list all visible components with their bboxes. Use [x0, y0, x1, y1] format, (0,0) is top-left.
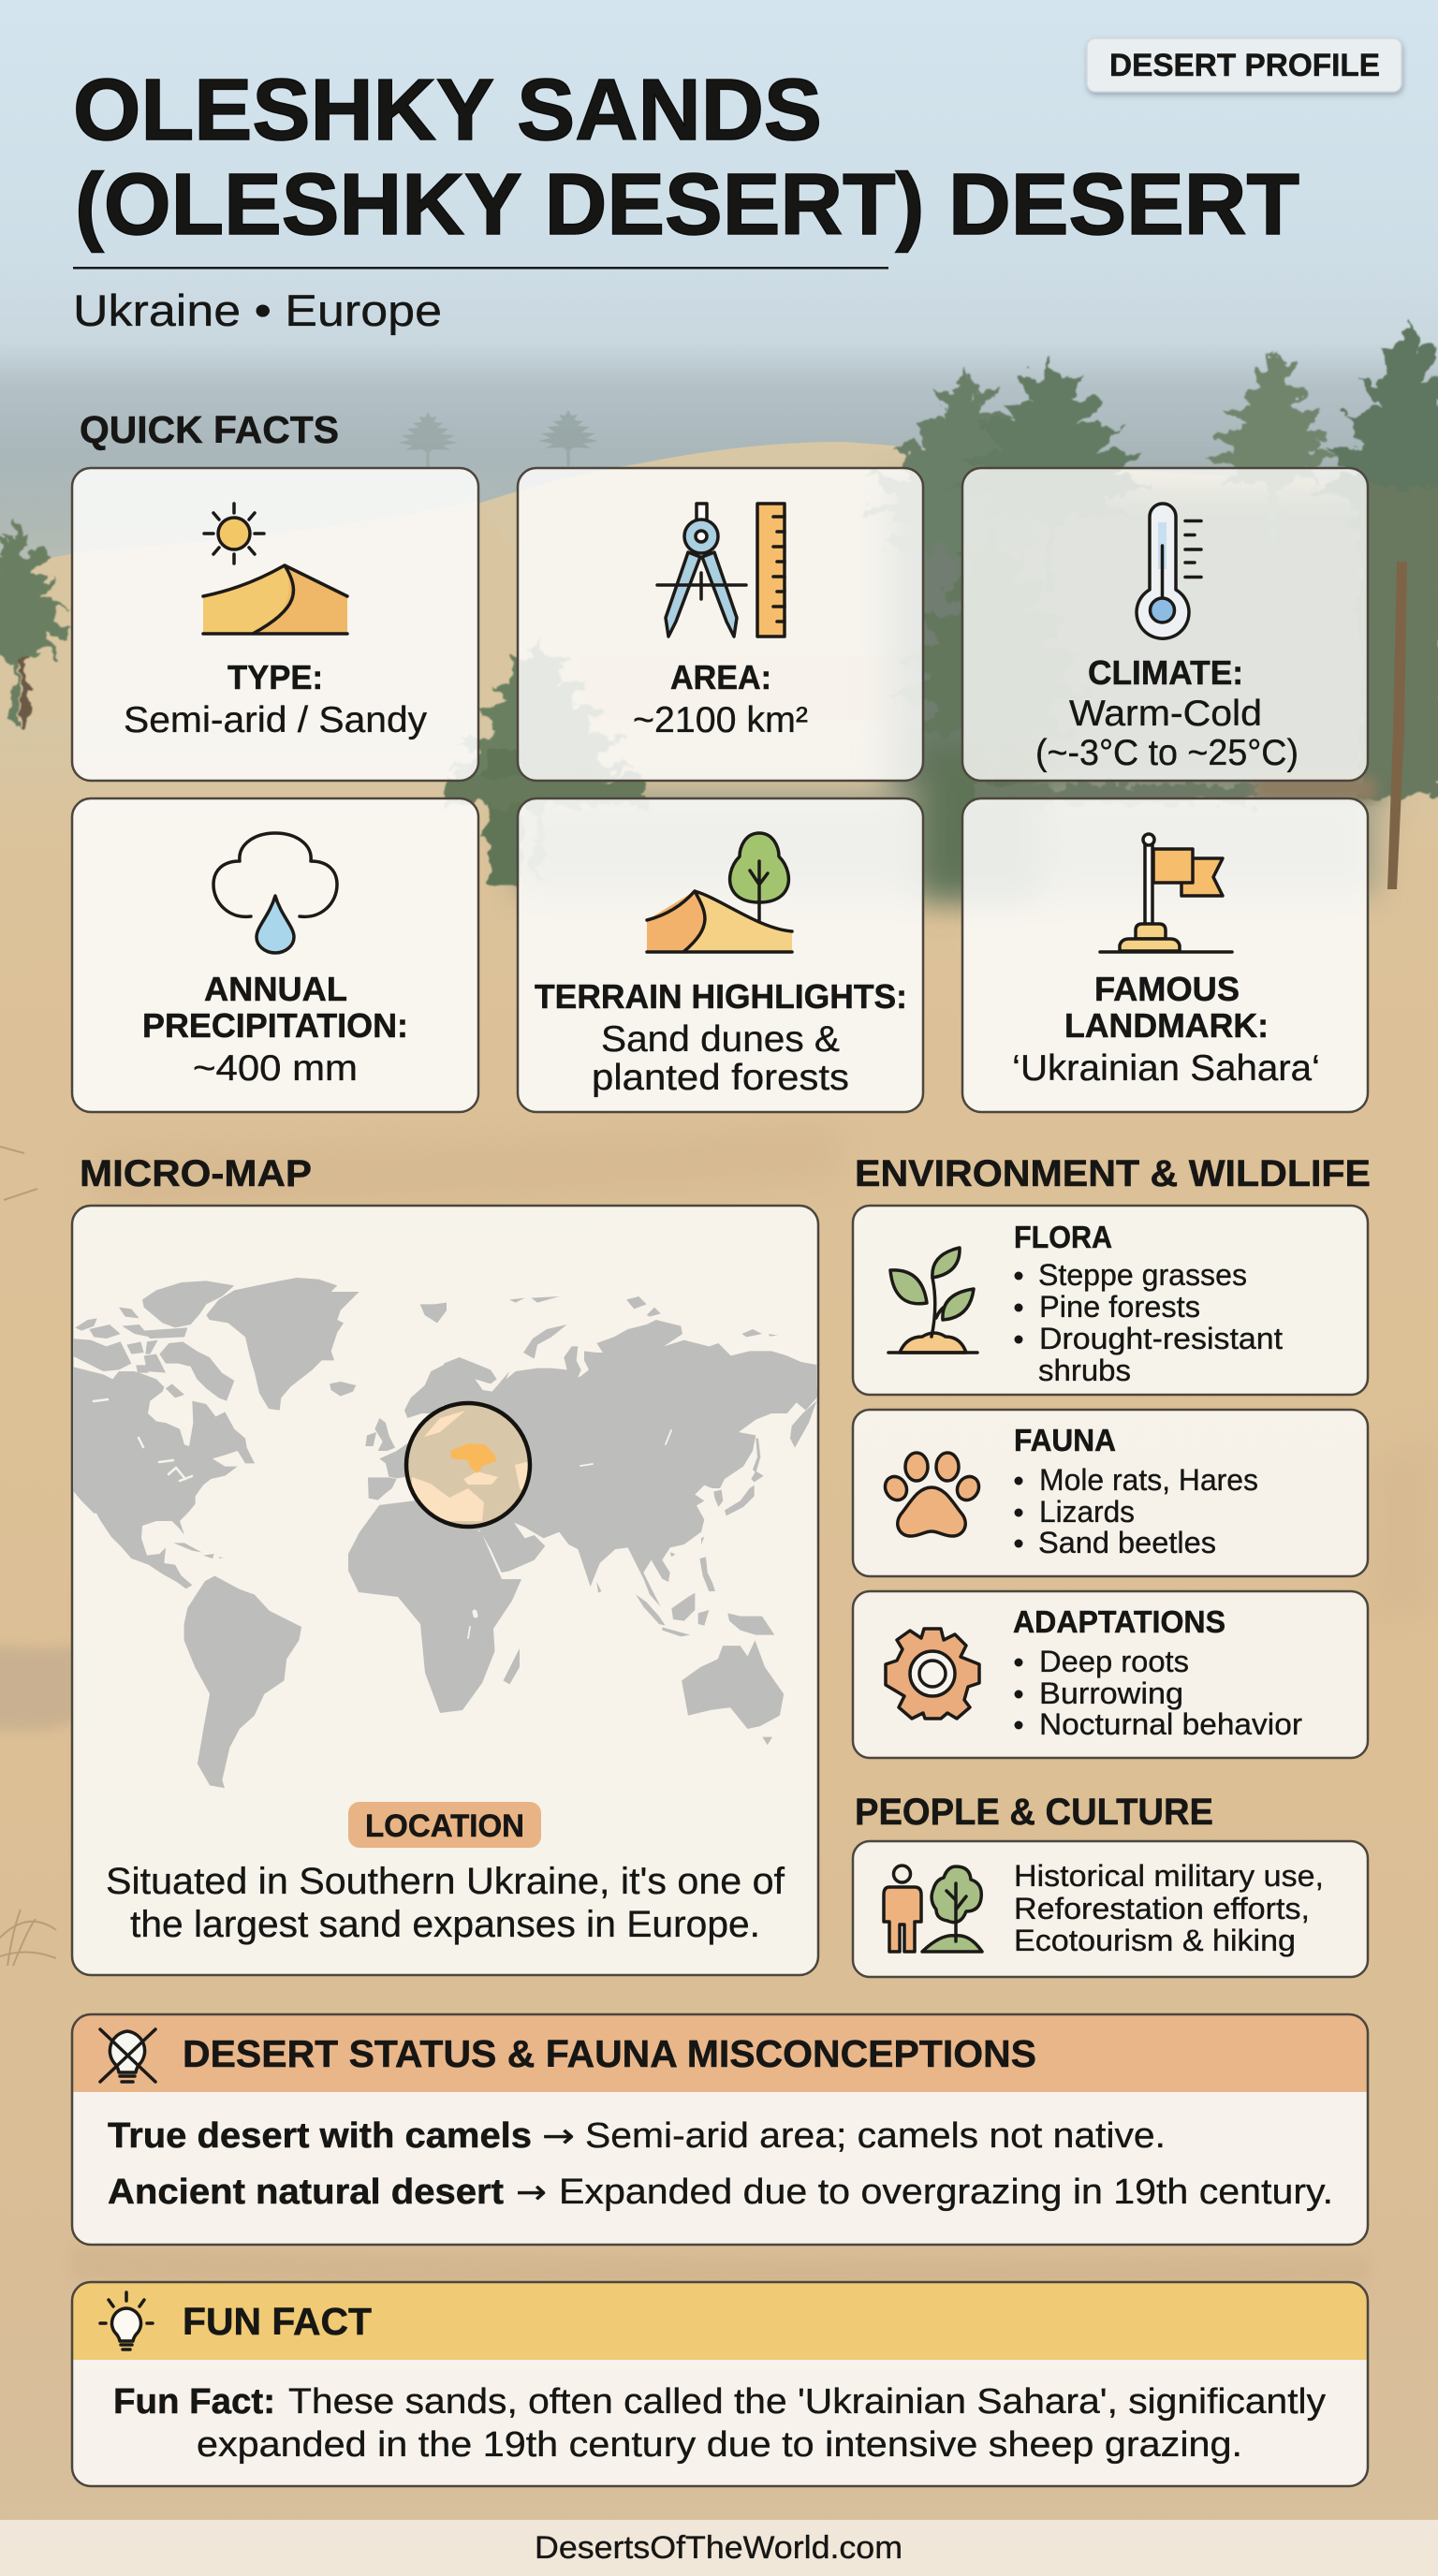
panel: type: Semi-arid / Sandy: [124, 700, 428, 740]
panel: adaptations: [853, 1591, 1368, 1758]
panel: adaptations: ADAPTATIONS: [1013, 1604, 1225, 1639]
text: people and culture: Reforestation efforts,: [1014, 1892, 1310, 1925]
badge: desert profile: [1087, 38, 1401, 92]
list: flora: Pine forests: [1039, 1290, 1200, 1324]
icon: paw print: [881, 1453, 983, 1536]
panel: desert status and fauna misconceptions: DESERT STATUS & FAUNA MISCONCEPTIONS: [183, 2032, 1036, 2075]
title: OLESHKY SANDS: [73, 61, 822, 158]
icon: cloud and rain drop: [213, 833, 337, 953]
panel: flora: FLORA: [1014, 1220, 1112, 1254]
footer: DesertsOfTheWorld.com: [535, 2530, 902, 2566]
map detail: lakes and inlets: [94, 1399, 671, 1638]
panel: people and culture: [853, 1841, 1368, 1977]
list: flora: Steppe grasses: [1038, 1258, 1247, 1292]
list: flora: shrubs: [1038, 1354, 1131, 1387]
panel: famous landmark: ‘Ukrainian Sahara‘: [1012, 1048, 1320, 1089]
icon: thermometer: [1137, 504, 1201, 638]
text: people and culture: Ecotourism & hiking: [1014, 1924, 1296, 1957]
list: adaptations: [1015, 1645, 1302, 1741]
panel: type: TYPE:: [227, 658, 323, 696]
icon: person and tree: [884, 1866, 982, 1952]
badge: location: LOCATION: [365, 1808, 524, 1844]
panel: climate: CLIMATE:: [1088, 653, 1243, 692]
panel: flora: [853, 1206, 1368, 1395]
panel: terrain highlights: planted forests: [592, 1058, 849, 1098]
panel: annual precipitation: ~400 mm: [193, 1048, 358, 1089]
panel: type: [72, 468, 478, 781]
panel: terrain highlights: [518, 798, 923, 1112]
fun fact text: expanded in the 19th century due to intensive sheep grazing.: [197, 2425, 1242, 2465]
world map: [72, 1278, 818, 1788]
panel: annual precipitation: PRECIPITATION:: [142, 1006, 408, 1045]
badge: location: [348, 1802, 541, 1848]
location description: Situated in Southern Ukraine, it's one of: [106, 1861, 785, 1902]
misconception 1: Semi-arid area; camels not native.: [585, 2116, 1166, 2156]
panel: micro-map: [72, 1206, 818, 1975]
icon: dune and tree: [647, 833, 792, 952]
panel: fun fact: [72, 2282, 1368, 2486]
panel: famous landmark: [962, 798, 1368, 1112]
list: fauna: Lizards: [1039, 1495, 1135, 1529]
fun fact text: [113, 2382, 1326, 2465]
list: flora: [1015, 1258, 1283, 1387]
heading: people and culture: PEOPLE & CULTURE: [855, 1792, 1213, 1833]
list: fauna: [1015, 1463, 1258, 1559]
map marker: Ukraine location: [405, 1402, 534, 1528]
location description: the largest sand expanses in Europe.: [130, 1904, 760, 1945]
list: adaptations: Burrowing: [1039, 1676, 1183, 1710]
text: people and culture: [1014, 1859, 1324, 1957]
location description: [106, 1861, 785, 1945]
misconception 1: →: [542, 2117, 575, 2156]
heading: environment and wildlife: ENVIRONMENT & WILDLIFE: [855, 1153, 1371, 1194]
misconception 1: [108, 2116, 1166, 2156]
list: flora: Drought-resistant: [1039, 1322, 1283, 1355]
soft tree masses behind the cards: [889, 487, 1386, 796]
panel: climate: [962, 468, 1368, 781]
panel: annual precipitation: ANNUAL: [204, 970, 347, 1008]
icon: crossed light bulb: [100, 2029, 155, 2082]
misconception 1: True desert with camels: [108, 2116, 532, 2156]
list: fauna: Sand beetles: [1038, 1526, 1216, 1559]
footer: [0, 2520, 1438, 2576]
fun fact text: Fun Fact:: [113, 2382, 275, 2422]
panel: fauna: FAUNA: [1014, 1423, 1116, 1457]
panel: annual precipitation: [72, 798, 478, 1112]
panel: climate: (~-3°C to ~25°C): [1035, 733, 1299, 773]
badge: desert profile: DESERT PROFILE: [1109, 48, 1380, 83]
panel: famous landmark: LANDMARK:: [1064, 1006, 1269, 1045]
fun fact text: These sands, often called the 'Ukrainian Sahara', significantly: [288, 2382, 1326, 2422]
panel: famous landmark: FAMOUS: [1094, 970, 1240, 1008]
list: adaptations: Nocturnal behavior: [1039, 1707, 1302, 1741]
text: people and culture: Historical military use,: [1014, 1859, 1324, 1893]
icon: sprout: [888, 1248, 977, 1353]
panel: area: AREA:: [670, 658, 771, 696]
list: fauna: Mole rats, Hares: [1039, 1463, 1258, 1497]
icon: compass and ruler: [657, 504, 785, 637]
panel: area: ~2100 km²: [633, 700, 808, 740]
title: (OLESHKY DESERT) DESERT: [75, 155, 1299, 253]
pines: [0, 320, 1438, 889]
panel: terrain highlights: Sand dunes &: [601, 1019, 840, 1060]
icon: flag on a base: [1100, 834, 1232, 952]
panel: desert status and fauna misconceptions: [72, 2014, 1368, 2245]
misconception 2: Ancient natural desert: [108, 2173, 504, 2212]
icon: gear: [886, 1629, 979, 1719]
icon: light bulb: [100, 2292, 153, 2349]
panel: climate: Warm-Cold: [1069, 694, 1262, 734]
title: [73, 61, 1299, 253]
list: adaptations: Deep roots: [1039, 1645, 1189, 1678]
heading: quick facts: QUICK FACTS: [80, 408, 339, 451]
subtitle: Ukraine • Europe: [73, 285, 442, 335]
misconception 2: [108, 2173, 1333, 2212]
panel: terrain highlights: TERRAIN HIGHLIGHTS:: [535, 977, 907, 1016]
panel: area: [518, 468, 923, 781]
misconception 2: Expanded due to overgrazing in 19th century.: [559, 2173, 1333, 2212]
misconception 2: →: [516, 2174, 547, 2212]
icon: sun and dune: [203, 504, 347, 634]
panel: fauna: [853, 1410, 1368, 1576]
heading: micro-map: MICRO-MAP: [80, 1153, 312, 1194]
panel: fun fact: FUN FACT: [183, 2300, 372, 2343]
